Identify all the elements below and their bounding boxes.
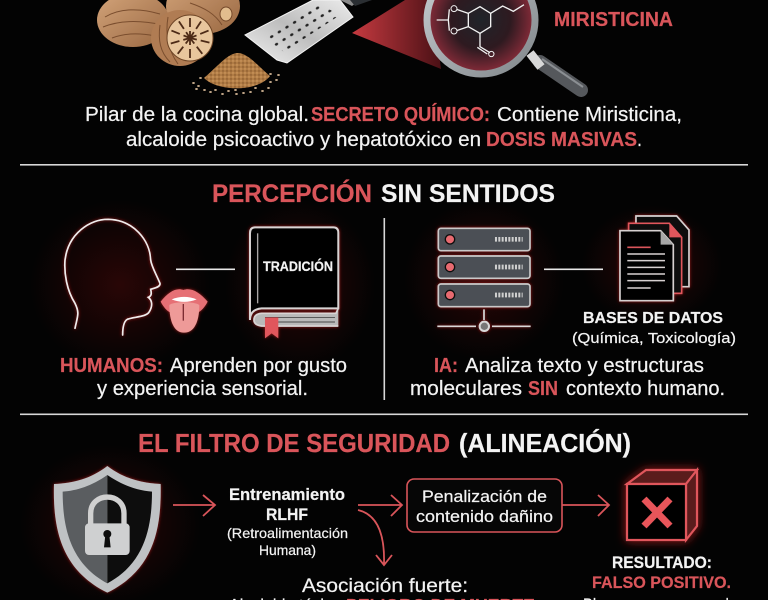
text block: humanos: Aprenden por gusto (170, 355, 347, 377)
icon: nutmegs (97, 0, 240, 66)
text block: humanos (60, 355, 347, 400)
icon: tongue and lips (161, 289, 208, 333)
text block: intro (85, 103, 682, 151)
text block: entrenamiento RLHF: Entrenamiento (229, 486, 345, 504)
text block: intro: SECRETO QUÍMICO: (311, 103, 490, 126)
text block: intro: alcaloide psicoactivo y hepatotóxico en (126, 129, 481, 151)
text block: IA: SIN (528, 378, 558, 400)
text block: IA: Analiza texto y estructuras (465, 355, 704, 377)
text block: humanos: y experiencia sensorial. (97, 378, 308, 400)
text block: intro: . (637, 129, 642, 151)
text block: IA: moleculares (410, 378, 522, 400)
label: bases de datos (572, 310, 736, 347)
text block: resultado: FALSO POSITIVO. (592, 574, 731, 592)
text block: entrenamiento RLHF (227, 486, 348, 558)
text block: asociación fuerte (229, 576, 535, 600)
label: miristicina: MIRISTICINA (554, 9, 673, 31)
text block: humanos: HUMANOS: (60, 355, 163, 377)
arrow: training to association (358, 510, 392, 565)
heading: percepción sin sentidos: SIN SENTIDOS (381, 180, 555, 208)
text block: resultado (583, 554, 738, 600)
icon: book (250, 227, 338, 338)
text block: intro: DOSIS MASIVAS (486, 129, 637, 151)
text block: IA (410, 355, 725, 400)
icon: human head (65, 219, 160, 335)
arrow: shield to training (173, 495, 215, 516)
icon: magnifying glass with molecule (427, 0, 583, 90)
icon: cube with X (627, 470, 697, 540)
heading: percepción sin sentidos: PERCEPCIÓN (212, 178, 372, 208)
icon: connector server to documents (544, 268, 603, 270)
heading: percepción sin sentidos (212, 178, 555, 208)
label: bases de datos: BASES DE DATOS (583, 310, 723, 327)
text block: intro: Contiene Miristicina, (497, 104, 682, 126)
icon: grater (245, 0, 372, 63)
text block: intro: Pilar de la cocina global. (85, 104, 309, 126)
heading: el filtro de seguridad: (ALINEACIÓN) (459, 428, 631, 458)
icon: connector human to book (176, 268, 235, 270)
heading: el filtro de seguridad: EL FILTRO DE SEGURIDAD (138, 428, 450, 458)
icon: server rack (437, 228, 531, 331)
label: tradición: TRADICIÓN (263, 259, 333, 274)
text block: entrenamiento RLHF: RLHF (266, 506, 308, 524)
box: penalización: Penalización de (422, 488, 547, 506)
arrow: training to penalty (358, 495, 402, 516)
text block: resultado: RESULTADO: (612, 554, 712, 572)
text block: entrenamiento RLHF: (Retroalimentación (227, 525, 348, 541)
text block: entrenamiento RLHF: Humana) (259, 542, 316, 558)
icon: ground nutmeg pile (193, 53, 279, 94)
box: penalización (407, 479, 562, 532)
icon: shield with padlock (54, 466, 161, 593)
icon: documents stack (620, 216, 689, 301)
box: penalización: contenido dañino (416, 508, 553, 526)
text block: asociación fuerte: Asociación fuerte: (302, 576, 468, 597)
heading: el filtro de seguridad (138, 428, 631, 458)
text block: IA: IA: (434, 355, 458, 377)
arrow: penalty to result (562, 495, 609, 516)
icon: red magnifying cone (352, 0, 441, 69)
label: bases de datos: (Química, Toxicología) (572, 330, 736, 347)
text block: IA: contexto humano. (566, 378, 725, 400)
